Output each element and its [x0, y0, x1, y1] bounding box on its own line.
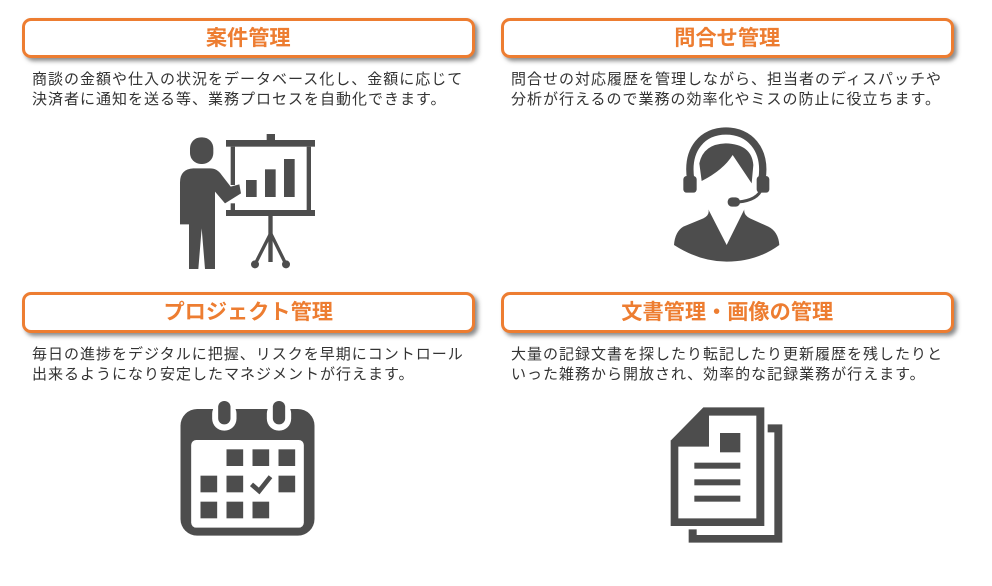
text: 問合せ管理 description: 分析が行えるので業務の効率化やミスの防止に役立ちます。: [511, 91, 941, 108]
icon: stacked documents: [671, 407, 782, 543]
text: プロジェクト管理 description: 毎日の進捗をデジタルに把握、リスクを早期にコントロール: [32, 346, 464, 362]
panel: 問合せ管理: [501, 18, 960, 108]
panel: プロジェクト管理: [22, 292, 481, 382]
heading: プロジェクト管理: プロジェクト管理: [163, 301, 333, 324]
text: 案件管理 description: 決済者に通知を送る等、業務プロセスを自動化できます。: [32, 91, 447, 108]
text: 案件管理 description: [32, 71, 463, 108]
text: 問合せ管理 description: 問合せの対応履歴を管理しながら、担当者のディスパッチや: [511, 71, 942, 88]
text: 文書管理・画像の管理 description: [511, 346, 943, 382]
heading: 問合せ管理: 問合せ管理: [674, 26, 780, 50]
icon: calendar with check: [180, 401, 314, 536]
text: 文書管理・画像の管理 description: いった雑務から開放され、効率的な記録業務が行えます。: [511, 366, 926, 382]
heading: 案件管理: 案件管理: [206, 26, 291, 50]
heading: 文書管理・画像の管理: [500, 292, 954, 332]
heading: 問合せ管理: [500, 18, 954, 58]
panel: 文書管理・画像の管理: [501, 292, 960, 382]
text: プロジェクト管理 description: [32, 346, 464, 382]
text: プロジェクト管理 description: 出来るようになり安定したマネジメントが行えます。: [32, 366, 415, 382]
text: 案件管理 description: 商談の金額や仕入の状況をデータベース化し、金額に応じて: [32, 71, 463, 88]
heading: 案件管理: [22, 18, 475, 58]
panel: 案件管理: [22, 18, 481, 108]
text: 問合せ管理 description: [511, 71, 942, 108]
icon: operator with headset: [674, 131, 779, 262]
heading: プロジェクト管理: [22, 292, 475, 332]
text: 文書管理・画像の管理 description: 大量の記録文書を探したり転記したり更新履歴を残したりと: [511, 346, 943, 362]
icon: presenter with chart board: [180, 134, 315, 269]
heading: 文書管理・画像の管理: 文書管理・画像の管理: [621, 301, 833, 324]
